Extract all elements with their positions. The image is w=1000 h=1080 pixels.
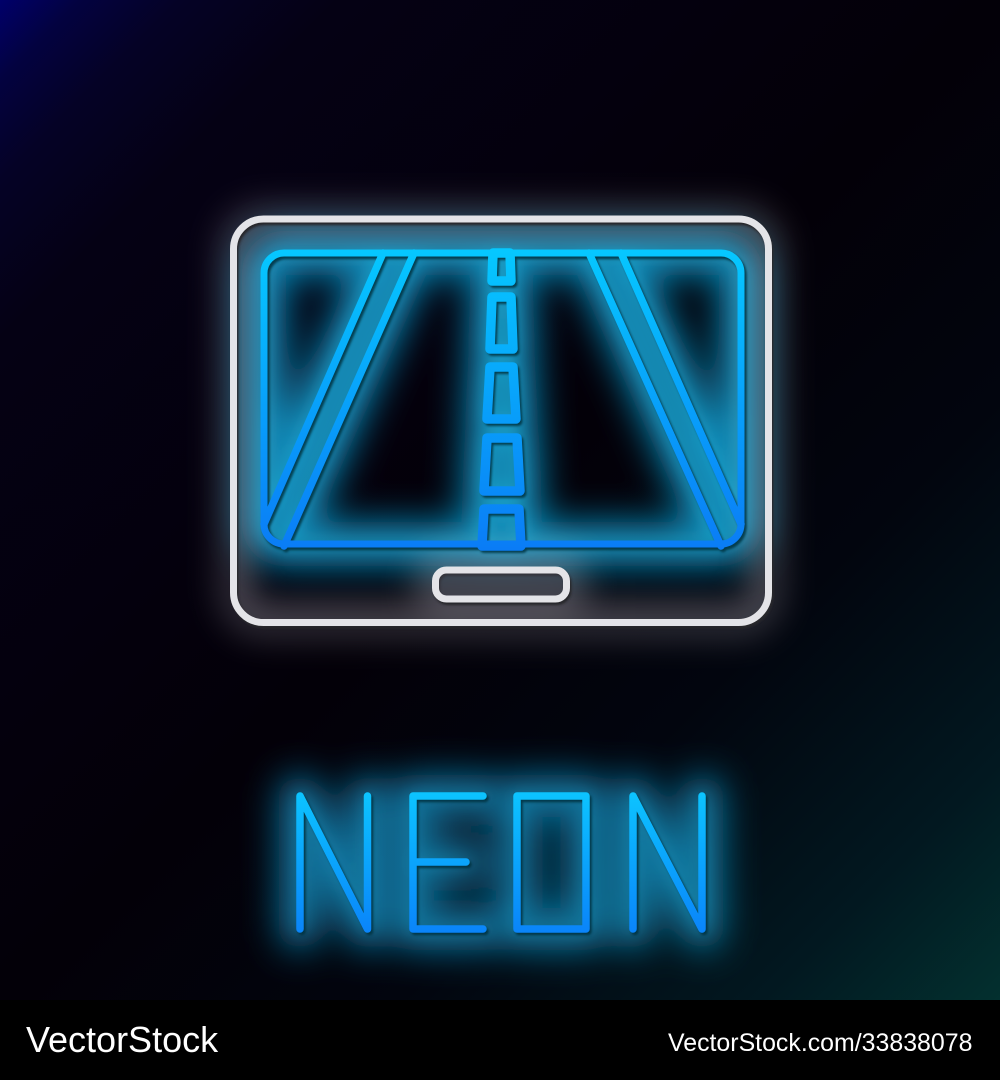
screen outline: [264, 253, 741, 544]
line shadows: [266, 256, 743, 548]
logo text: VectorStock: [26, 1019, 218, 1060]
screen and road blue glow: [264, 253, 741, 546]
road centre dashes: [482, 253, 521, 546]
word glow: [300, 796, 702, 929]
icon: neon tablet with road: [234, 219, 770, 625]
footer bar: [0, 1000, 1000, 1080]
road edges: [264, 253, 741, 546]
tablet grey glow: [234, 219, 768, 622]
home button: [436, 570, 566, 599]
heading: NEON: NEON: [296, 765, 706, 972]
image url: VectorStock.com/33838078: [668, 1029, 972, 1057]
tablet body: [234, 219, 768, 622]
